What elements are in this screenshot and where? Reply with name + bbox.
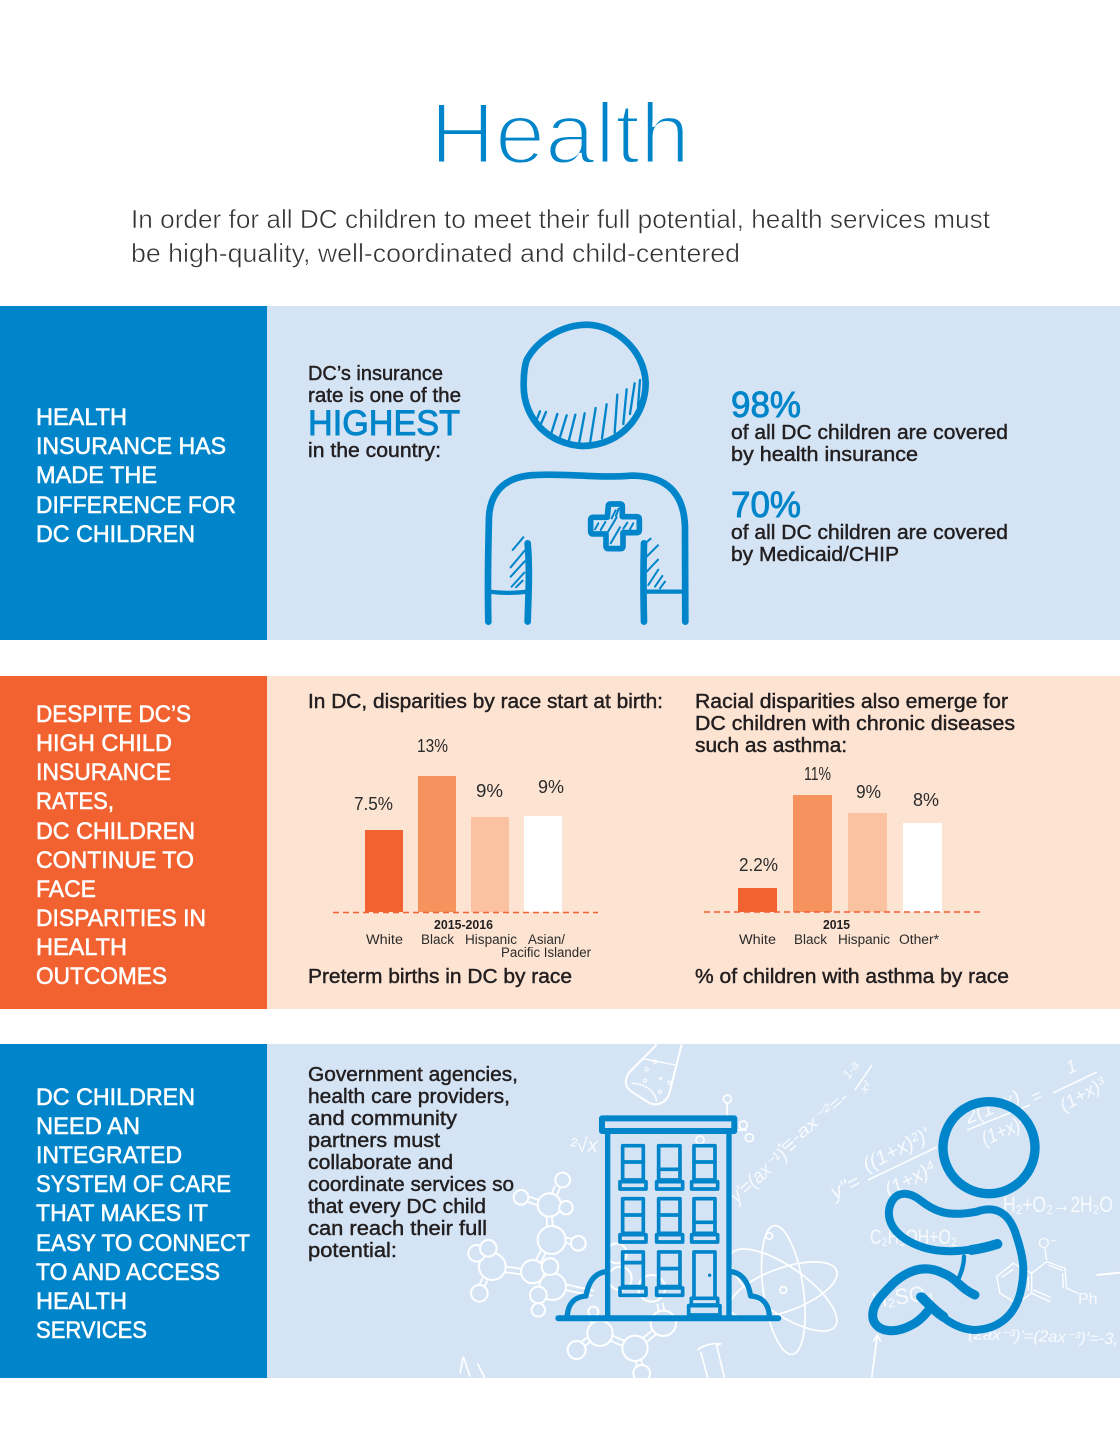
background: science doodles: ²√x [570,1135,599,1157]
icon: baby [873,1102,1035,1331]
heading: integrated system: DC CHILDREN [36,1084,195,1111]
panel: disparities [0,676,1120,1009]
text: disparities at birth: In DC, disparities by race start at birth: [308,691,663,713]
heading: disparities: FACE [36,876,96,903]
heading: disparities: CONTINUE TO [36,847,194,874]
heading: integrated system: EASY TO CONNECT [36,1230,250,1257]
bar chart: preterm births: Asian/ [528,932,565,947]
text: collaboration: partners must [308,1130,440,1152]
background: science doodles: (2ax⁻³)'=(2ax⁻³)'=-3, [968,1326,1118,1348]
text: collaboration: potential: [308,1240,397,1262]
background: science doodles: C₂H₅OH+O₂ [870,1226,957,1249]
heading: integrated system: NEED AN [36,1113,140,1140]
background: science doodles: 2(1+x) [961,1087,1024,1129]
bar chart: preterm births: 9% [538,776,564,797]
caption: asthma: % of children with asthma by race [695,966,1009,988]
bar chart: preterm births: 9% [476,780,503,801]
caption: preterm births: Preterm births in DC by race [308,966,572,988]
bar chart: asthma: 9% [856,781,881,802]
heading: integrated system: THAT MAKES IT [36,1200,208,1227]
bar chart: asthma: 2.2% [739,854,778,875]
heading: disparities [0,676,267,1009]
intro text: In order for all DC children to meet their full potential, health services must [131,204,991,234]
stat: 70%: by Medicaid/CHIP [731,544,899,566]
background: science doodles: (1+x)³ [1056,1073,1110,1115]
text: chronic diseases: such as asthma: [695,735,847,757]
heading: health insurance: DC CHILDREN [36,521,195,548]
title: Health [430,86,690,182]
bar chart: preterm births: Black [421,932,454,947]
heading: integrated system [0,1044,267,1378]
bar chart: asthma: 11% [804,763,831,784]
text: highest insurance rate: DC’s insurance [308,363,443,385]
text: chronic diseases [695,691,1015,757]
bar chart: preterm births: 7.5% [354,793,393,814]
background: science doodles: O⁻ [1038,1235,1058,1252]
bar chart: preterm births: 13% [417,735,448,756]
heading: disparities: RATES, [36,788,114,815]
panel: integrated system of care [0,1044,1120,1382]
heading: disparities: HIGH CHILD [36,730,172,757]
background: science doodles: (1+x)⁴ [978,1111,1031,1151]
text: collaboration: health care providers, [308,1086,510,1108]
background: science doodles: ((1+x)²)' [859,1124,935,1176]
background: science doodles [460,1045,1120,1382]
text: collaboration: Government agencies, [308,1064,518,1086]
background: science doodles: (1+x)⁴ [881,1157,940,1201]
heading: disparities: HEALTH [36,934,127,961]
panel: health insurance [0,306,1120,640]
icon: apartment building [558,1118,778,1318]
text: collaboration [308,1064,518,1262]
background: science doodles: x² [856,1078,875,1097]
stat: 70%: of all DC children are covered [731,522,1008,544]
background: science doodles: 1 [1063,1055,1080,1078]
heading: integrated system: SERVICES [36,1317,147,1344]
heading: disparities: INSURANCE [36,759,171,786]
intro text: be high-quality, well-coordinated and child-centered [131,238,740,268]
text: collaboration: can reach their full [308,1218,487,1240]
background: science doodles: Ph [1078,1291,1098,1308]
bar chart: preterm births [333,735,598,960]
stat: 70% [731,484,1008,566]
background: science doodles: y"= [825,1170,864,1205]
text: collaboration: coordinate services so [308,1174,514,1196]
text: highest insurance rate: in the country: [308,440,441,462]
bar chart: preterm births: Hispanic [465,932,517,947]
background: science doodles: = [1027,1085,1045,1108]
stat: 98%: 98% [731,384,801,425]
heading: integrated system: HEALTH [36,1288,127,1315]
bar chart: asthma: 8% [913,789,939,810]
heading: integrated system: TO AND ACCESS [36,1259,220,1286]
heading: integrated system: SYSTEM OF CARE [36,1171,231,1198]
text: collaboration: and community [308,1108,457,1130]
text: highest insurance rate: HIGHEST [308,404,460,443]
bar chart: preterm births: White [366,932,403,947]
background: science doodles: '=-ax⁻²=- [773,1087,853,1158]
text: highest insurance rate [308,363,461,462]
text: chronic diseases: DC children with chronic diseases [695,713,1015,735]
heading: disparities: DC CHILDREN [36,818,195,845]
bar chart: preterm births: 2015-2016 [434,917,493,932]
bar chart: asthma: Hispanic [838,932,890,947]
heading: disparities: DISPARITIES IN [36,905,206,932]
bar chart: preterm births: Pacific Islander [501,945,591,960]
background: science doodles: y'=(ax⁻¹)'= [724,1135,803,1209]
background: science doodles: 1-a [839,1058,862,1082]
heading: health insurance: MADE THE [36,462,157,489]
bar chart: asthma: Black [794,932,827,947]
heading: disparities: OUTCOMES [36,963,167,990]
bar chart: asthma: Other* [899,932,940,947]
stat: 98% [731,384,1008,466]
heading: health insurance: INSURANCE HAS [36,433,226,460]
stat: 98%: by health insurance [731,444,918,466]
text: chronic diseases: Racial disparities also emerge for [695,691,1008,713]
stat: 70%: 70% [731,484,801,525]
text: highest insurance rate: rate is one of the [308,385,461,407]
heading: integrated system: INTEGRATED [36,1142,182,1169]
intro text [131,204,991,268]
bar chart: asthma [704,763,981,947]
bar chart: asthma: 2015 [823,917,850,932]
heading: health insurance: HEALTH [36,404,127,431]
heading: health insurance [0,306,267,640]
heading: disparities: DESPITE DC’S [36,701,191,728]
bar chart: asthma: White [739,932,776,947]
text: collaboration: that every DC child [308,1196,486,1218]
heading: health insurance: DIFFERENCE FOR [36,492,236,519]
text: collaboration: collaborate and [308,1152,453,1174]
stat: 98%: of all DC children are covered [731,422,1008,444]
icon: child with medical cross [488,325,685,622]
background: science doodles: H₂SO₄ [870,1280,935,1313]
